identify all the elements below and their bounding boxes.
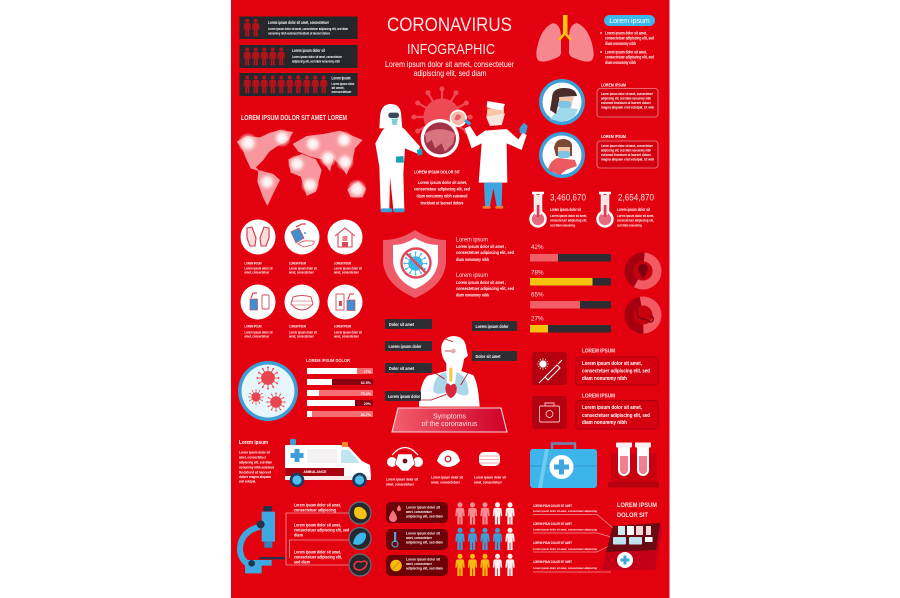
stat: thermometer two: Lorem ipsum dolor sit — [617, 207, 650, 212]
pill: blood — [386, 502, 448, 523]
title: INFOGRAPHIC — [407, 41, 495, 58]
text block: lorem ipsum left: Lorem ipsum — [239, 440, 268, 446]
chart: horizontal percentage bars: 75.2% — [361, 392, 372, 396]
pill: tablet: adipiscing elit, sed diam — [406, 566, 443, 570]
text block: lorem ipsum left — [239, 440, 275, 484]
icon: gas mask: amet, consectetuer — [386, 482, 415, 486]
world map heading: LOREM IPSUM DOLOR SIT AMET LOREM — [241, 115, 347, 122]
panel: lorem ipsum pill and bullets: diam nonummy nibh — [605, 60, 636, 65]
panel: first aid note: Lorem ipsum dolor sit amet, — [582, 405, 642, 411]
text block: microscope notes: sed diam — [294, 560, 310, 564]
list: medicine notes with leader lines: LOREM IPSUM DOLOR SIT AMET — [533, 541, 572, 545]
illustration: ambulance: AMBULANCE — [303, 470, 327, 474]
stat: thermometer one: consectetuer adipiscing elit, — [550, 218, 587, 222]
bar: two people — [240, 16, 358, 39]
chart: progress bars: 65% — [531, 292, 544, 298]
icon: hand sanitizer: LOREM IPSUM — [289, 262, 306, 266]
chart: pictogram of people — [455, 502, 515, 576]
pill: thermometer: Lorem ipsum dolor sit — [406, 532, 441, 536]
title: Lorem ipsum dolor sit amet, consectetuer — [385, 59, 514, 69]
text block: central description — [414, 170, 470, 206]
chart: progress bars: 78% — [531, 270, 544, 276]
symptom labels: Lorem ipsum dolor — [388, 344, 422, 349]
pill: thermometer — [386, 529, 448, 550]
icon: syringe and virus — [532, 352, 567, 385]
illustration: first aid kit — [530, 444, 597, 488]
figure: hazmat worker — [375, 104, 423, 212]
illustration: scientists with virus — [375, 89, 528, 212]
panel: first aid note: diam nonummy nibh — [582, 420, 627, 426]
text block: central description: diam nonummy nibh euismod — [416, 194, 468, 200]
text block: microscope notes: consectetuer adipiscing elit, sed — [294, 528, 349, 532]
icon: gloves — [240, 220, 276, 274]
panel: first aid note: LOREM IPSUM — [582, 394, 616, 400]
icon: face mask: Lorem ipsum dolor sit — [289, 330, 318, 334]
bar: five people — [240, 45, 358, 68]
text block: shield notes: Lorem ipsum dolor sit amet , — [456, 280, 507, 286]
symptom labels: Lorem ipsum dolor — [388, 394, 420, 399]
text block: symptom one: adipiscing elit, sed diam nonummy nibh — [601, 96, 651, 100]
panel: vaccine note: LOREM IPSUM — [582, 348, 616, 354]
text block: symptom two: adipiscing elit, sed diam nonummy nibh — [601, 148, 651, 152]
list: medicine notes with leader lines: LOREM IPSUM DOLOR SIT AMET — [533, 560, 572, 564]
text block: microscope notes: Lorem ipsum dolor sit amet, — [294, 550, 341, 554]
icon: red bacteria — [349, 554, 371, 576]
panel: first aid note: consectetuer adipiscing elit, sed — [582, 413, 650, 419]
illustration: human body symptoms — [419, 336, 480, 407]
bar: ten people: consectetuer — [332, 90, 352, 94]
text block: microscope notes: consectetuer adipiscing elit, — [294, 554, 342, 560]
text block: lorem ipsum left: Lorem ipsum dolor sit — [239, 450, 271, 454]
text block: shield notes: consectetuer adipiscing elit, sed — [456, 286, 514, 292]
bar: two people: Lorem ipsum dolor sit amet, consectetuer — [268, 20, 329, 25]
banner: symptoms of the coronavirus — [392, 408, 507, 432]
icon: shield with crossed virus — [383, 230, 446, 298]
panel: lorem ipsum pill and bullets — [600, 15, 655, 65]
panel: respirator icons — [386, 448, 507, 486]
icon: gloves: LOREM IPSUM — [244, 262, 262, 266]
chart: horizontal percentage bars: 20% — [364, 402, 372, 406]
icon: man coughing — [539, 132, 585, 178]
panel: lorem ipsum pill and bullets: Lorem ipsum dolor sit amet, — [605, 30, 647, 36]
text block: shield notes: diam nonummy nibh — [456, 292, 489, 298]
stat: thermometer two: Lorem ipsum dolor sit amet, — [617, 214, 654, 218]
text block: symptom one — [597, 82, 658, 117]
list: medicine notes with leader lines: Lorem ipsum dolor sit amet, consectetuer adipiscing — [533, 547, 597, 551]
text block: symptom two: Lorem ipsum dolor sit amet, consectetuer — [601, 144, 653, 148]
stat: thermometer two: consectetuer adipiscing elit, — [617, 218, 654, 222]
text block: lorem ipsum left: adipiscing elit, sed diam — [239, 460, 273, 464]
icon: respirator cup: Lorem ipsum dolor sit — [431, 476, 464, 480]
icon: house: Lorem ipsum dolor sit — [334, 266, 363, 270]
text block: lorem ipsum left: amet, consectetuer — [239, 456, 266, 460]
text block: symptom one: euismod tincidunt ut laoreet dolore — [601, 101, 651, 105]
icon: yellow bacteria — [349, 502, 371, 524]
panel: people statistic bars — [240, 16, 358, 96]
bar: two people: Lorem ipsum dolor sit amet, consectetuer adipiscing elit, sed diam — [268, 27, 348, 31]
chart: progress bars: 42% — [531, 244, 544, 251]
chart: horizontal percentage bars — [306, 358, 373, 417]
icon: big virus — [414, 89, 470, 145]
text block: shield notes: Lorem ipsum — [456, 272, 488, 279]
pill: blood: adipiscing elit, sed diam — [406, 514, 443, 518]
panel: lorem ipsum pill and bullets: consectetuer adipiscing elit, sed — [605, 36, 654, 40]
text block: lorem ipsum left: erat volutpat. — [239, 480, 256, 484]
symptom labels: Dolor sit amet — [389, 366, 414, 371]
heading: lorem ipsum dolor sit — [617, 502, 657, 519]
symptom labels: Dolor sit amet — [476, 354, 501, 359]
text block: shield notes: Lorem ipsum dolor sit amet , — [456, 244, 507, 250]
icon: face mask — [284, 284, 320, 338]
title: adipiscing elit, sed diam — [414, 68, 487, 78]
symptom labels — [385, 319, 517, 401]
bar: ten people — [240, 73, 358, 96]
chart: horizontal percentage bars: 17% — [364, 370, 372, 374]
icon: hand sanitizer: Lorem ipsum dolor sit — [289, 266, 318, 270]
figure: doctor — [450, 101, 528, 209]
icon: lungs in body — [433, 372, 469, 395]
chart: donut with location pin — [628, 256, 658, 286]
panel: vaccine note: diam nonummy nibh — [582, 376, 627, 382]
illustration: open medicine case — [602, 523, 662, 570]
pill: thermometer: adipiscing elit, sed diam — [406, 540, 443, 544]
figure: torso and head — [419, 336, 480, 407]
bar: five people: adipiscing elit, sed diam nonummy nibh — [292, 60, 340, 64]
icon: medical case — [532, 396, 567, 429]
chart: world map — [237, 129, 366, 206]
icon: surgical mask — [474, 452, 507, 484]
panel: lorem ipsum pill and bullets: Lorem ipsum — [609, 18, 650, 25]
icon: hand sanitizer: amet, consectetuer — [289, 270, 315, 274]
list: medicine notes with leader lines: Lorem ipsum dolor sit amet, consectetuer adipiscing — [533, 509, 597, 513]
text block: lorem ipsum left: dolore magna aliquam — [239, 475, 272, 479]
symptom labels: Lorem ipsum dolor — [476, 324, 509, 329]
stat: thermometer one: Lorem ipsum dolor sit amet, — [550, 214, 587, 218]
red poster background — [231, 0, 670, 598]
list: medicine notes with leader lines: LOREM IPSUM DOLOR SIT AMET — [533, 522, 572, 526]
bar: ten people: sit amet, — [332, 86, 345, 90]
illustration: test tubes — [608, 442, 659, 488]
bar: two people: nonummy nibh euismod tincidunt ut laoreet dolore — [268, 32, 330, 36]
icon: spray and phone: Lorem ipsum dolor sit — [244, 330, 273, 334]
text block: microscope notes: diam — [294, 532, 303, 538]
pill: tablet: amet, consectetuer — [406, 562, 432, 566]
panel: first aid note — [532, 394, 658, 429]
text block: symptom two: magna aliquam erat volutpat. Ut wisi — [601, 158, 654, 162]
icon: woman with mask — [539, 79, 585, 125]
stat: thermometer one: sed diam nonummy — [550, 224, 575, 228]
icon: windpipe — [449, 368, 452, 382]
icon: respirator cup: amet, consectetuer — [431, 480, 461, 484]
icon: surgical mask: Lorem ipsum dolor sit — [474, 476, 507, 480]
pill: blood: Lorem ipsum dolor sit — [406, 506, 441, 510]
text block: shield notes: consectetuer adipiscing elit, sed — [456, 250, 514, 256]
chart: horizontal percentage bars: 62.5% — [361, 381, 372, 385]
text block: symptom two: LOREM IPSUM — [601, 134, 626, 139]
icon: disinfecting door: amet, consectetuer — [334, 334, 360, 338]
text block: symptom two: euismod tincidunt ut laoreet dolore — [601, 153, 651, 157]
text block: lorem ipsum left: tincidunt ut laoreet — [239, 470, 272, 474]
text block: symptom one: magna aliquam erat volutpat. Ut wisi — [601, 106, 654, 110]
text block: central description: LOREM IPSUM DOLOR SIT — [414, 170, 460, 174]
text block: central description: tincidunt ut laoreet dolore — [420, 200, 464, 206]
icon: disinfecting door — [328, 284, 363, 338]
icon: gloves: Lorem ipsum dolor sit — [244, 266, 273, 270]
icon: surgical mask: amet, consectetuer — [474, 480, 503, 484]
icon: gas mask — [386, 448, 423, 486]
stat: thermometer one: Lorem ipsum dolor sit — [550, 207, 581, 212]
icon: magnifier — [421, 119, 459, 158]
text block: symptom one: Lorem ipsum dolor sit amet, consectetuer — [601, 92, 653, 96]
chart: horizontal percentage bars: LOREM IPSUM DOLOR — [306, 358, 350, 364]
text block: microscope notes: consectetuer adipiscing — [294, 508, 336, 512]
banner: symptoms of the coronavirus: of the coronavirus — [422, 421, 478, 428]
text block: symptom two — [597, 134, 658, 168]
panel: vaccine note: consectetuer adipiscing elit, sed — [582, 368, 650, 374]
chart: horizontal percentage bars: 86.7% — [361, 413, 372, 417]
heading: lorem ipsum dolor sit: LOREM IPSUM — [617, 502, 657, 509]
chart: donut with stethoscope — [627, 299, 659, 331]
pill: blood: amet, consectetuer — [406, 510, 432, 514]
illustration: microscope — [240, 506, 285, 573]
icon: gas mask: Lorem ipsum dolor sit — [386, 478, 419, 482]
stat: thermometer one: 3,460,670 — [550, 192, 586, 204]
pill: tablet — [386, 555, 448, 576]
bar: ten people: Lorem ipsum — [332, 76, 351, 80]
icon: heart — [445, 383, 457, 398]
bar: five people: Lorem ipsum dolor sit — [292, 48, 325, 53]
panel: condition pills — [386, 502, 448, 576]
title — [385, 14, 514, 78]
text block: microscope notes: Lorem ipsum dolor sit amet, — [294, 502, 341, 508]
text block: shield notes: diam nonummy nibh — [456, 257, 489, 263]
panel: prevention icons — [240, 220, 363, 338]
stat: thermometer two: 2,654,870 — [618, 192, 654, 204]
panel: lorem ipsum pill and bullets: consectetuer adipiscing elit, sed — [605, 54, 654, 60]
text block: shield notes: Lorem ipsum — [456, 236, 488, 244]
stat: thermometer two: sed diam nonummy — [617, 224, 642, 228]
icon: face mask: LOREM IPSUM — [289, 324, 306, 328]
icon: spray and phone: amet, consectetuer — [244, 334, 270, 338]
title: CORONAVIRUS — [387, 14, 512, 36]
illustration: ambulance — [285, 439, 371, 487]
connector lines: microscope to samples — [286, 513, 349, 565]
icon: spray and phone — [240, 284, 276, 338]
icon: house — [328, 220, 363, 274]
bar: ten people: Lorem ipsum dolor — [332, 82, 355, 86]
panel: lorem ipsum pill and bullets: diam nonummy nibh — [605, 41, 636, 46]
list: medicine notes with leader lines: LOREM IPSUM DOLOR SIT AMET — [533, 504, 572, 508]
illustration: petri dish — [238, 361, 298, 421]
bar: five people: Lorem ipsum dolor sit amet, consectetuer — [292, 55, 343, 59]
text block: central description: consectetuer adipiscing elit, sed — [414, 186, 470, 192]
text block: shield notes — [456, 236, 514, 298]
heading: lorem ipsum dolor sit: DOLOR SIT — [617, 512, 648, 519]
icon: face mask: amet, consectetuer — [289, 334, 315, 338]
text block: central description: Lorem ipsum dolor sit amet, — [418, 180, 467, 186]
icon: hand sanitizer — [284, 220, 320, 274]
text block: microscope notes: Lorem ipsum dolor sit amet, — [294, 522, 341, 528]
symptom labels: Dolor sit amet — [389, 322, 414, 327]
stat: thermometer two — [598, 192, 654, 228]
icon: gloves: amet, consectetuer — [244, 270, 270, 274]
pill: tablet: Lorem ipsum dolor sit — [406, 558, 441, 562]
list: medicine notes with leader lines: Lorem ipsum dolor sit amet, consectetuer adipiscing — [533, 528, 597, 532]
banner: symptoms of the coronavirus: Symptoms — [433, 414, 467, 420]
text block: lorem ipsum left: nonummy nibh euismod — [239, 466, 275, 470]
icon: respirator cup — [431, 450, 464, 484]
icon: blue bacteria — [349, 528, 371, 550]
panel: vaccine note — [532, 348, 658, 385]
list: medicine notes with leader lines — [533, 504, 615, 572]
text block: microscope notes — [294, 502, 349, 564]
icon: house: amet, consectetuer — [334, 270, 360, 274]
icon: disinfecting door: LOREM IPSUM — [334, 324, 351, 328]
icon: lungs — [536, 15, 594, 62]
pill: thermometer: amet, consectetuer — [406, 536, 432, 540]
chart: progress bars: 27% — [531, 316, 544, 322]
list: medicine notes with leader lines: Lorem ipsum dolor sit amet, consectetuer adipiscing — [533, 566, 597, 570]
stat: thermometer one — [530, 192, 587, 228]
icon: house: LOREM IPSUM — [334, 262, 351, 266]
panel: lorem ipsum pill and bullets: Lorem ipsum dolor sit amet, — [605, 50, 647, 54]
text block: symptom one: LOREM IPSUM — [601, 82, 626, 88]
panel: vaccine note: Lorem ipsum dolor sit amet, — [582, 361, 642, 367]
icon: spray and phone: LOREM IPSUM — [244, 324, 262, 328]
chart: progress bars — [530, 244, 611, 332]
icon: disinfecting door: Lorem ipsum dolor sit — [334, 330, 363, 334]
